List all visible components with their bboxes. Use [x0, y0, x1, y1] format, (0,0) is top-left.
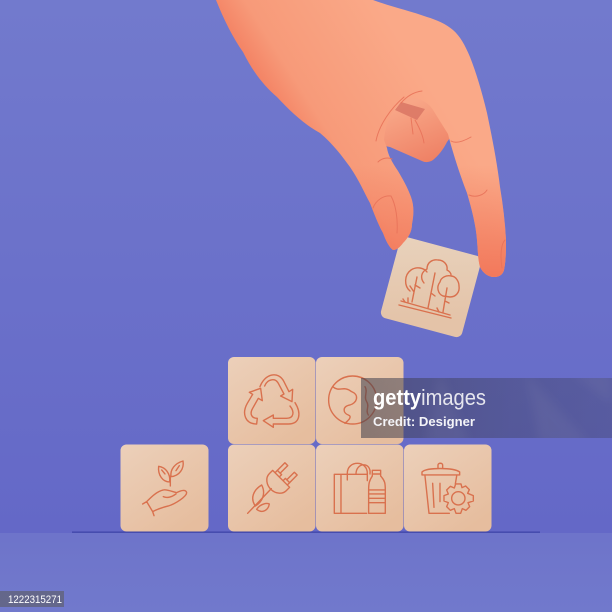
watermark logo text: gettyimages	[373, 385, 486, 410]
middle finger	[380, 90, 452, 162]
block: globe	[316, 357, 404, 444]
fingertip shading	[216, 0, 506, 277]
icon: seedling in hand	[143, 461, 187, 516]
icon: globe	[329, 376, 377, 424]
block: bag and bottle	[316, 444, 404, 532]
watermark credit text: Credit: Designer	[373, 415, 475, 429]
icon: trees	[399, 260, 459, 318]
icon: shopping bag and bottle	[334, 463, 385, 513]
tilted block: forest	[380, 236, 482, 338]
block: hand with seedling	[120, 444, 208, 532]
block: recycling	[228, 357, 316, 444]
floor	[0, 533, 612, 612]
image id text: 1222315271	[8, 594, 62, 606]
fingernail: middle finger	[395, 102, 425, 120]
icon: trash bin with gear	[422, 463, 473, 513]
floor line	[72, 532, 540, 533]
block: plant plug	[228, 444, 316, 532]
image id tag	[0, 591, 64, 607]
watermark banner	[361, 378, 612, 438]
icon: recycling arrows	[245, 375, 299, 427]
finger creases and nails	[373, 91, 505, 268]
hand	[216, 0, 506, 277]
block: bin and gear	[404, 444, 492, 532]
icon: plug with leaves	[248, 460, 300, 513]
